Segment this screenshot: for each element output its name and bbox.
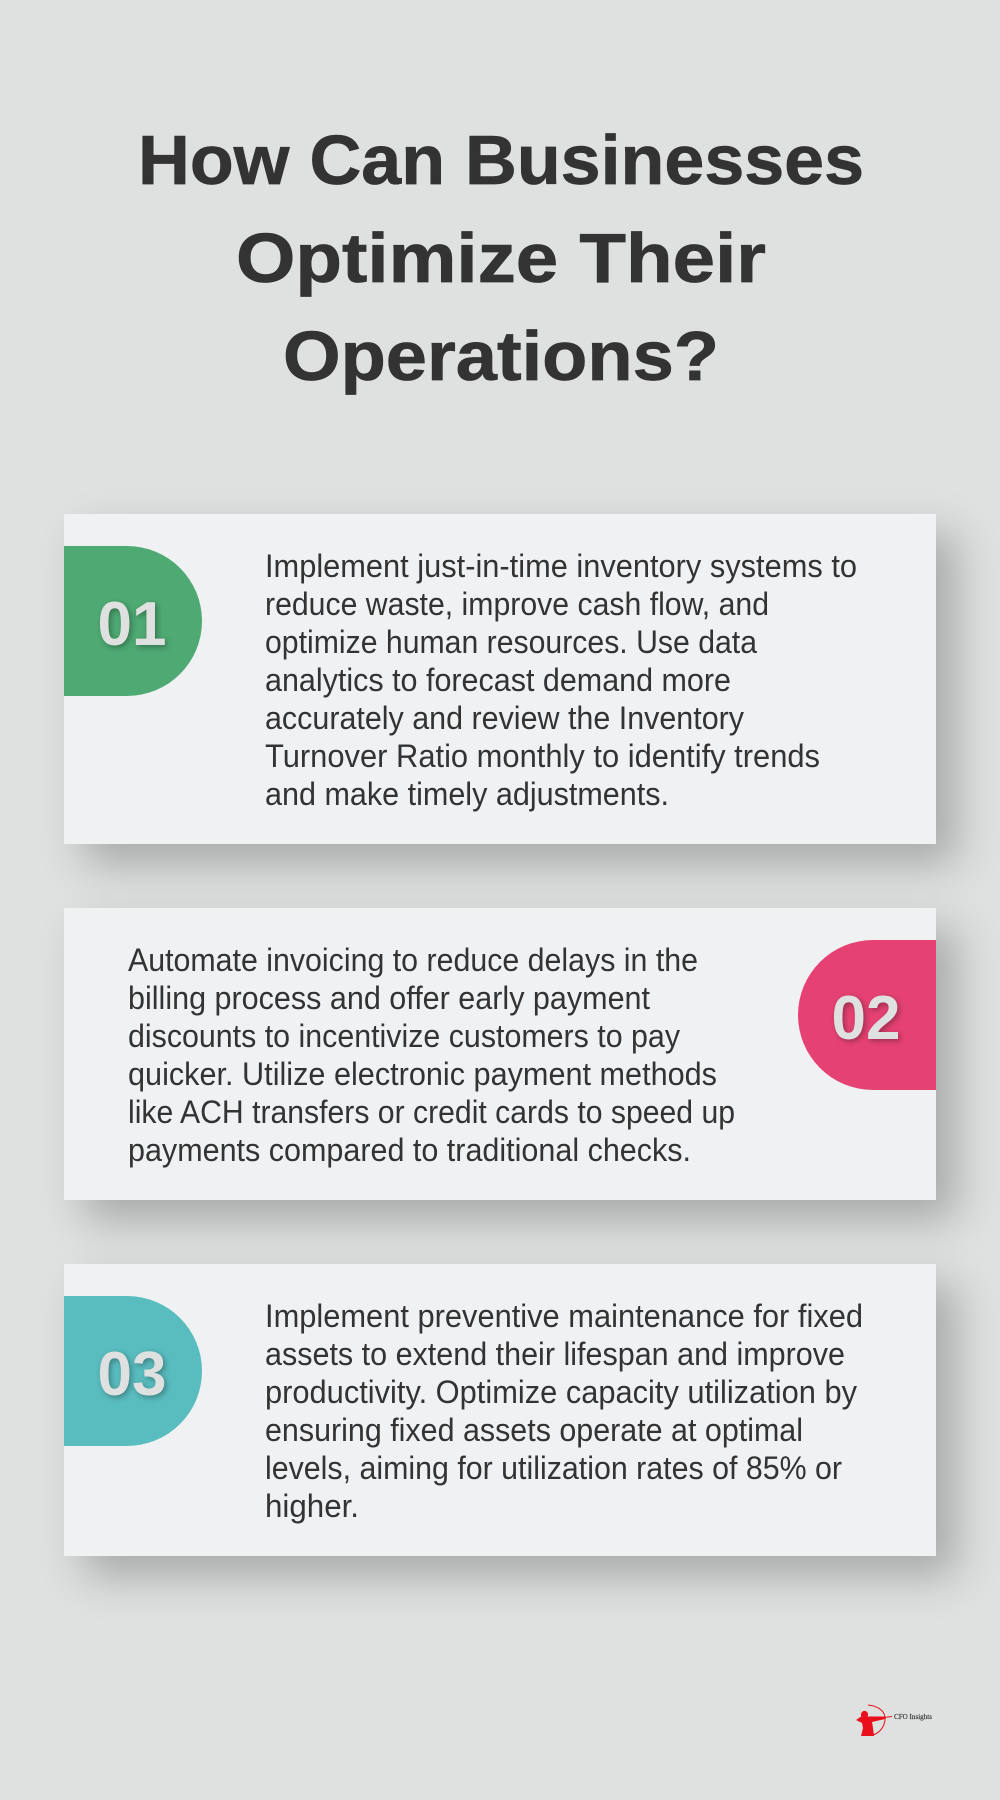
text block: step 02: billing process and offer early payment: [128, 980, 650, 1016]
text block: step 01: [265, 548, 857, 812]
badge: 03: [64, 1296, 202, 1446]
text block: step 01: Turnover Ratio monthly to identify trends: [265, 738, 820, 774]
text block: step 03: higher.: [265, 1488, 359, 1524]
badge: 02: 02: [832, 984, 900, 1053]
text block: step 03: Implement preventive maintenance for fixed: [265, 1298, 863, 1334]
text block: step 01: reduce waste, improve cash flow, and: [265, 586, 769, 622]
text block: step 03: assets to extend their lifespan and improve: [265, 1336, 845, 1372]
text block: step 01: accurately and review the Inventory: [265, 700, 744, 736]
title: How Can Businesses: [138, 121, 864, 199]
badge: 01: [64, 546, 202, 696]
text block: step 03: ensuring fixed assets operate at optimal: [265, 1412, 803, 1448]
title: [138, 121, 864, 395]
panel: step 01: [64, 514, 936, 844]
title: Operations?: [283, 317, 719, 395]
text block: step 02: Automate invoicing to reduce delays in the: [128, 942, 698, 978]
text block: step 01: Implement just-in-time inventory systems to: [265, 548, 857, 584]
panel: step 02: [64, 908, 936, 1200]
text block: step 01: optimize human resources. Use data: [265, 624, 757, 660]
panel: step 03: [64, 1264, 936, 1556]
text block: step 02: discounts to incentivize customers to pay: [128, 1018, 680, 1054]
text block: step 02: payments compared to traditional checks.: [128, 1132, 691, 1168]
badge: 02: [798, 940, 936, 1090]
text block: step 02: [128, 942, 735, 1168]
text block: step 03: productivity. Optimize capacity utilization by: [265, 1374, 857, 1410]
logo: CFO Insights archer: [856, 1704, 932, 1736]
text block: step 02: quicker. Utilize electronic payment methods: [128, 1056, 717, 1092]
logo: CFO Insights archer: CFO Insights: [894, 1714, 932, 1721]
text block: step 03: [265, 1298, 863, 1524]
badge: 03: 03: [98, 1340, 166, 1409]
text block: step 01: analytics to forecast demand more: [265, 662, 731, 698]
text block: step 03: levels, aiming for utilization rates of 85% or: [265, 1450, 842, 1486]
text block: step 01: and make timely adjustments.: [265, 776, 669, 812]
text block: step 02: like ACH transfers or credit cards to speed up: [128, 1094, 735, 1130]
title: Optimize Their: [236, 219, 766, 297]
badge: 01: 01: [98, 590, 166, 659]
